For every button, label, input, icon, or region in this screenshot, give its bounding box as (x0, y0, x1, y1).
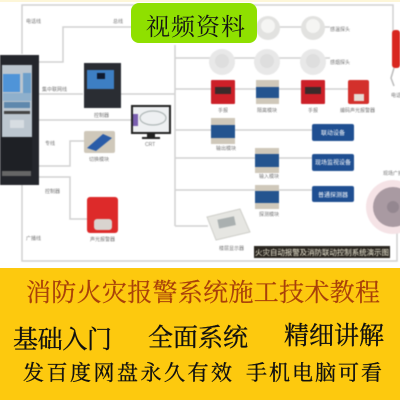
icon: floor display: 楼层显示器 (219, 245, 244, 252)
icon: fire alarm control cabinet (0, 55, 39, 185)
icon: floor display (207, 209, 250, 252)
manual alarm and isolation row: 隔离模块 (257, 107, 277, 114)
diagram label: concentrated network line: 集中联网线 (42, 86, 67, 93)
output module row: 联动设备 (321, 129, 345, 137)
input module row: 现场监视设备 (315, 158, 351, 166)
output module row: 输出模块 (216, 145, 236, 152)
course title: 消防火灾报警系统施工技术教程 (26, 279, 380, 307)
icon: broadcast speaker (366, 170, 400, 234)
icon: CRT monitor (131, 105, 171, 148)
manual alarm and isolation row: 手报 (218, 107, 228, 114)
feature: basic intro: 基础入门 (13, 326, 112, 354)
manual alarm and isolation row: 手报 (308, 107, 318, 114)
diagram label: control unit: 控制器 (45, 188, 60, 195)
input module row: 输入模块 (259, 173, 279, 180)
icon: CRT monitor: CRT (145, 142, 155, 148)
input module row (255, 148, 354, 180)
diagram label: broadcast line: 广播线 (26, 235, 41, 242)
output module row (211, 118, 354, 152)
icon: switching module: 切换模块 (89, 156, 109, 163)
smoke detectors row (209, 49, 350, 75)
diagram label: controller: 控制器 (94, 112, 109, 119)
icon: switching module (84, 131, 115, 163)
icon: telephone (391, 30, 400, 99)
bottom yellow banner (0, 268, 400, 400)
video badge: 视频资料 (146, 14, 245, 41)
delivery note: Baidu netdisk: 发百度网盘永久有效 (23, 361, 232, 385)
manual alarm and isolation row (211, 80, 375, 114)
heat detectors row (256, 16, 350, 40)
detection module row (255, 185, 354, 218)
smoke detectors row: 感烟探头 (330, 59, 350, 66)
caption: system diagram title: 火灾自动报警及消防联动控制系统演示图 (255, 247, 389, 257)
icon: sounder alarm (87, 197, 118, 243)
diagram label: bus line: 总线 (113, 18, 123, 25)
heat detectors row: 感温探头 (330, 26, 350, 33)
icon: controller unit (84, 63, 121, 108)
detection module row: 探测模块 (259, 211, 279, 218)
delivery note: phone and computer: 手机电脑可看 (246, 361, 382, 385)
system wiring diagram (0, 5, 400, 261)
feature: detailed explanation: 精细讲解 (284, 322, 384, 350)
detection module row: 普通探测器 (318, 191, 348, 199)
video badge (131, 3, 257, 43)
diagram label: dedicated line: 专线 (45, 140, 55, 147)
feature: comprehensive system: 全面系统 (148, 324, 248, 352)
manual alarm and isolation row: 编码声光报警器 (340, 107, 375, 114)
diagram label: telephone line: 电话线 (26, 18, 41, 25)
icon: sounder alarm: 声光报警器 (90, 236, 115, 243)
